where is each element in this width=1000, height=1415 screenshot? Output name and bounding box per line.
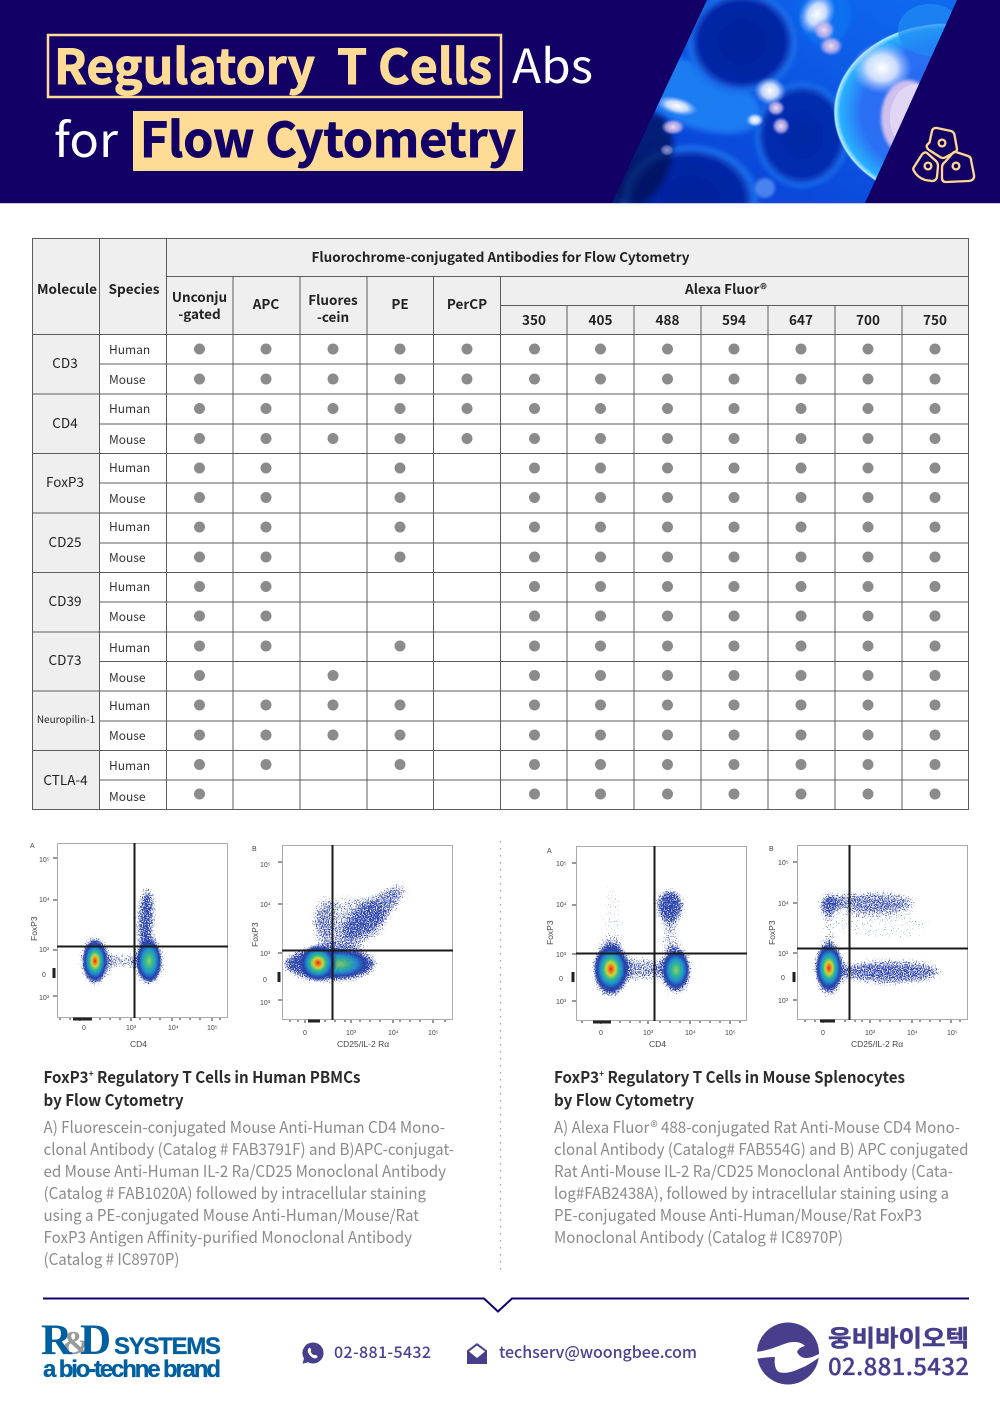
axis labels: FoxP3	[767, 920, 777, 945]
scatter cloud	[814, 890, 944, 997]
axis labels: 10⁵	[778, 860, 789, 867]
logo: R&D Systems	[41, 1317, 221, 1383]
axis labels: A	[30, 843, 35, 850]
axis labels: 0	[821, 1030, 825, 1037]
caption body: Monoclonal Antibody (Catalog # IC8970P)	[554, 1224, 843, 1248]
caption body: PE-conjugated Mouse Anti-Human/Mouse/Rat FoxP3	[554, 1202, 922, 1226]
caption heading: by Flow Cytometry	[44, 1087, 184, 1111]
species labels: Human	[109, 341, 150, 358]
caption: mouse splenocytes	[554, 1064, 968, 1248]
molecule labels: CTLA-4	[43, 769, 88, 789]
caption heading: +	[89, 1067, 94, 1080]
scatter cloud	[592, 880, 692, 998]
axis ticks	[53, 858, 220, 1021]
caption heading: FoxP3	[44, 1064, 91, 1088]
axis ticks	[278, 862, 445, 1023]
scatter cloud	[282, 874, 416, 983]
species labels: Mouse	[109, 669, 146, 686]
caption body: log#FAB2438A), followed by intracellular staining using a	[554, 1180, 949, 1204]
table column headers: 750	[923, 309, 947, 329]
table column headers: 700	[856, 309, 880, 329]
caption body: clonal Antibody (Catalog# FAB554G) and B) APC conjugated	[554, 1136, 968, 1160]
table column headers: -cein	[317, 306, 349, 326]
table column headers	[37, 246, 947, 329]
availability dots	[200, 349, 935, 794]
table column headers: Molecule	[37, 278, 97, 298]
axis labels: 0	[263, 977, 267, 984]
species labels: Mouse	[109, 788, 146, 805]
axis labels: 10⁴	[778, 901, 789, 908]
icon: eagle circle	[755, 1322, 821, 1384]
axis labels: 10⁴	[685, 1030, 696, 1037]
axis labels: A	[547, 848, 552, 855]
table column headers: Unconju	[172, 286, 227, 306]
molecule labels: FoxP3	[46, 471, 84, 491]
caption body: clonal Antibody (Catalog # FAB3791F) and B)APC-conjugat-	[44, 1136, 454, 1160]
axis labels: 10⁵	[428, 1030, 439, 1037]
species labels: Mouse	[109, 608, 146, 625]
axis labels: 0	[303, 1030, 307, 1037]
logo: R&D Systems: &	[62, 1325, 90, 1362]
axis labels: B	[252, 846, 257, 853]
species labels: Human	[109, 459, 150, 476]
caption heading	[44, 1064, 361, 1111]
molecule labels	[37, 352, 95, 789]
axis labels: 10³	[556, 952, 567, 959]
axis labels: 10⁴	[907, 1030, 918, 1037]
caption body: FoxP3 Antigen Affinity-purified Monoclonal Antibody	[44, 1224, 413, 1248]
table column headers: PerCP	[447, 293, 487, 313]
axis labels: 0	[559, 976, 563, 983]
species labels: Human	[109, 697, 150, 714]
axis ticks	[572, 863, 740, 1024]
species labels	[109, 341, 150, 805]
table column headers: Species	[108, 278, 160, 298]
axis labels	[29, 843, 218, 1049]
table column headers: -gated	[178, 303, 221, 323]
density population	[593, 944, 629, 994]
axis labels: CD25/IL-2 Rα	[851, 1039, 903, 1049]
species labels: Mouse	[109, 727, 146, 744]
icon: envelope	[467, 1343, 487, 1364]
icon: cells	[913, 128, 974, 182]
logo: R&D Systems: R	[41, 1317, 73, 1364]
axis labels: 10³	[126, 1025, 137, 1032]
molecule labels: CD39	[49, 590, 81, 610]
axis labels: 10⁵	[260, 862, 271, 869]
molecule labels: CD73	[49, 649, 81, 669]
axis labels: CD25/IL-2 Rα	[337, 1039, 389, 1049]
axis labels: 10⁵	[39, 857, 50, 864]
species labels: Mouse	[109, 490, 146, 507]
axis labels	[250, 846, 439, 1049]
table column headers: 647	[789, 309, 813, 329]
contact: phone: 02-881-5432	[334, 1339, 431, 1363]
axis labels: 10³	[643, 1030, 654, 1037]
flow plot: human CD4 vs FoxP3	[29, 843, 228, 1049]
species labels: Mouse	[109, 431, 146, 448]
axis labels: 10⁵	[947, 1030, 958, 1037]
table header background	[32, 238, 968, 809]
caption body: (Catalog # IC8970P)	[44, 1246, 180, 1270]
caption body: using a PE-conjugated Mouse Anti-Human/Mouse/Rat	[44, 1202, 419, 1226]
axis labels: CD4	[130, 1039, 147, 1049]
caption body	[44, 1114, 454, 1270]
density population	[82, 939, 108, 983]
caption heading: Regulatory T Cells in Human PBMCs	[94, 1064, 361, 1088]
axis labels: 0	[781, 975, 785, 982]
table column headers: 405	[589, 309, 612, 329]
icon: phone	[302, 1342, 324, 1364]
caption body: A) Fluorescein-conjugated Mouse Anti-Human CD4 Mono-	[44, 1114, 445, 1138]
caption heading	[554, 1064, 905, 1111]
axis labels: 10³	[556, 999, 567, 1006]
axis labels: 10⁴	[168, 1025, 179, 1032]
axis labels: 10³	[346, 1030, 357, 1037]
logo: R&D Systems: SYSTEMS	[114, 1333, 221, 1360]
molecule labels: CD4	[52, 412, 78, 432]
axis labels: 10³	[260, 951, 271, 958]
axis labels: FoxP3	[29, 916, 39, 941]
table column headers: Alexa Fluor®	[684, 278, 767, 298]
flow plot: mouse CD4 vs FoxP3	[545, 846, 747, 1049]
axis labels: 10⁴	[556, 902, 567, 909]
axis labels	[545, 848, 736, 1049]
flow plot: mouse CD25 vs FoxP3	[767, 845, 968, 1049]
logo: Woongbee Biotech	[755, 1319, 969, 1384]
species labels: Human	[109, 757, 150, 774]
caption body	[554, 1114, 968, 1248]
table column headers: Fluores	[308, 289, 358, 309]
density population	[310, 949, 370, 979]
caption heading: FoxP3	[554, 1064, 602, 1088]
header banner	[0, 0, 1000, 204]
axis labels: 10³	[778, 998, 789, 1005]
scatter cloud	[80, 884, 164, 986]
axis labels: 10⁴	[388, 1030, 399, 1037]
species labels: Mouse	[109, 549, 146, 566]
table column headers: PE	[391, 293, 409, 313]
logo: Woongbee Biotech: 웅비바이오텍	[828, 1319, 969, 1353]
title line 2 highlight: Flow Cytometry	[140, 101, 516, 171]
divider	[500, 841, 502, 1275]
axis labels: 10³	[39, 995, 50, 1002]
title word: for: for	[54, 102, 119, 171]
species labels: Human	[109, 639, 150, 656]
table column headers: 488	[656, 309, 679, 329]
title line 1 box: Regulatory T Cells	[54, 28, 492, 98]
axis labels: 10³	[260, 1000, 271, 1007]
axis labels: FoxP3	[545, 920, 555, 945]
axis labels	[767, 846, 958, 1049]
logo: Woongbee Biotech: 02.881.5432	[828, 1347, 969, 1382]
molecule labels: Neuropilin-1	[37, 711, 95, 726]
caption heading: by Flow Cytometry	[554, 1087, 694, 1111]
caption body: (Catalog # FAB1020A) followed by intracellular staining	[44, 1180, 426, 1204]
axis labels: 0	[599, 1030, 603, 1037]
table column headers: APC	[252, 293, 279, 313]
species labels: Human	[109, 400, 150, 417]
table column headers: Fluorochrome-conjugated Antibodies for Flow Cytometry	[312, 246, 690, 266]
axis labels: 10³	[865, 1030, 876, 1037]
axis ticks	[793, 862, 960, 1023]
axis labels: 10⁴	[260, 902, 271, 909]
caption body: Rat Anti-Mouse IL-2 Ra/CD25 Monoclonal Antibody (Cata-	[554, 1158, 953, 1182]
contact: email: techserv@woongbee.com	[499, 1339, 697, 1363]
axis labels: 10³	[778, 951, 789, 958]
species labels: Mouse	[109, 371, 146, 388]
caption heading: Regulatory T Cells in Mouse Splenocytes	[604, 1064, 905, 1088]
species labels: Human	[109, 578, 150, 595]
flow plot: human CD25 vs FoxP3	[250, 845, 453, 1049]
title	[48, 28, 593, 171]
table column headers: 594	[722, 309, 746, 329]
title word: Abs: Abs	[512, 28, 593, 97]
caption: human PBMCs	[44, 1064, 454, 1270]
axis labels: B	[769, 846, 774, 853]
caption body: A) Alexa Fluor® 488-conjugated Rat Anti-Mouse CD4 Mono-	[554, 1114, 960, 1138]
species labels: Human	[109, 518, 150, 535]
table column headers: 350	[522, 309, 546, 329]
density population	[815, 944, 843, 992]
axis labels: 10⁵	[207, 1025, 218, 1032]
axis labels: 0	[42, 972, 46, 979]
axis labels: 10³	[39, 947, 50, 954]
antibody table	[32, 238, 968, 810]
axis labels: 10⁵	[556, 861, 567, 868]
logo: R&D Systems: a bio-techne brand	[43, 1356, 221, 1383]
axis labels: FoxP3	[250, 922, 260, 947]
molecule labels: CD3	[52, 352, 78, 372]
axis labels: 10⁴	[39, 897, 50, 904]
caption heading: +	[599, 1067, 604, 1080]
axis labels: 0	[82, 1025, 86, 1032]
axis labels: 10⁵	[725, 1030, 736, 1037]
header cell image	[612, 0, 957, 203]
logo: R&D Systems: D	[80, 1317, 111, 1364]
caption body: ed Mouse Anti-Human IL-2 Ra/CD25 Monoclonal Antibody	[44, 1158, 447, 1182]
axis labels: CD4	[649, 1039, 666, 1049]
molecule labels: CD25	[49, 531, 81, 551]
footer divider with chevron	[43, 1298, 969, 1312]
